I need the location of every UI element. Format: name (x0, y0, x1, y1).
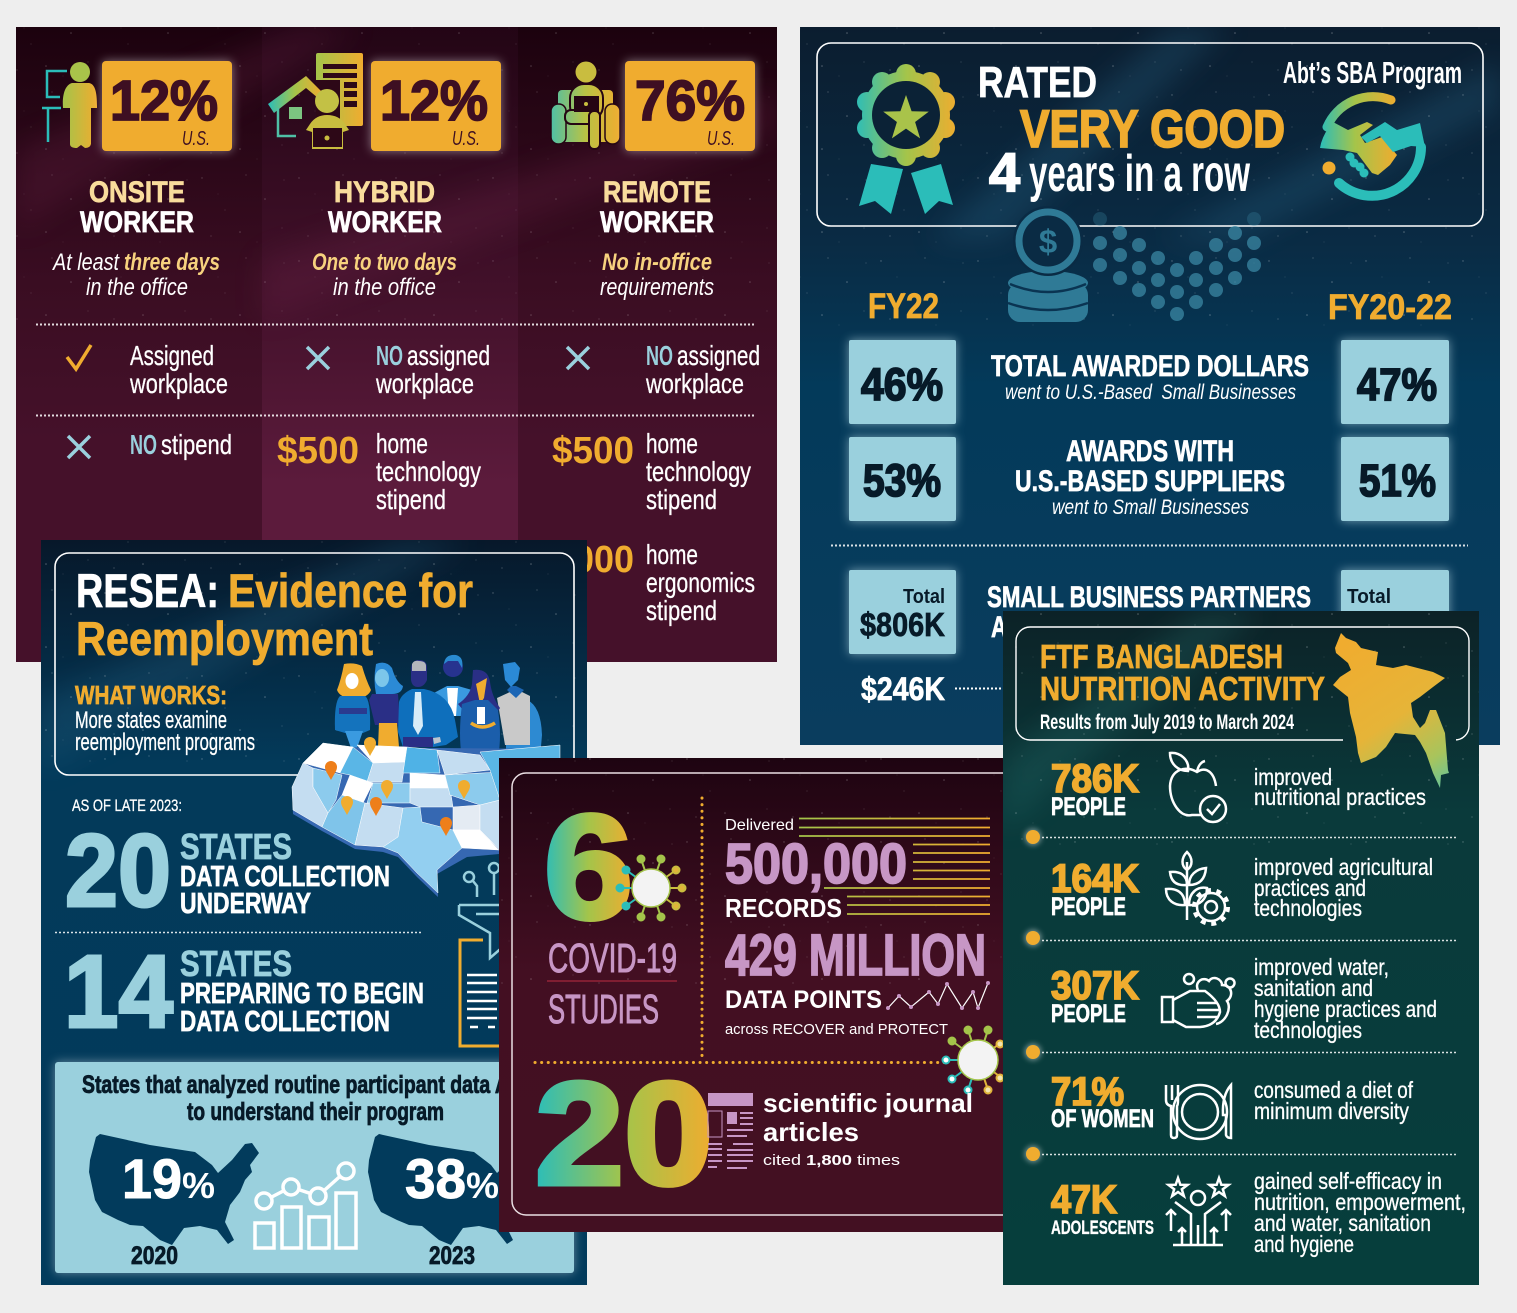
row: remote benefits: workplace (645, 368, 744, 399)
text: remote description: requirements (600, 274, 714, 301)
text: scientific journal articles: scientific journal (763, 1088, 973, 1118)
text: scientific journal articles: 1,800 (806, 1153, 852, 1169)
stat: 20 states: 20 (65, 813, 171, 928)
row: hybrid benefits (277, 340, 490, 515)
heading: onsite worker: ONSITE (89, 176, 185, 209)
title: FTF Bangladesh: FTF BANGLADESH (1040, 638, 1283, 675)
icon: virus (616, 856, 686, 920)
stat boxes: right column: 51% (1359, 455, 1436, 506)
map: United States states with pins (292, 737, 560, 897)
pattern: dotted heart graphic (1093, 212, 1261, 321)
row: hybrid benefits: assigned (407, 340, 490, 371)
row: 307K people: 307K (1051, 964, 1139, 1008)
figure: man behind (432, 655, 472, 716)
row: 786K people: PEOPLE (1051, 793, 1126, 821)
text: small business partners: A (991, 611, 1007, 644)
row: 164K people: PEOPLE (1051, 893, 1126, 921)
dividers with dots (1025, 829, 1456, 1162)
stat boxes: right column (1341, 340, 1449, 654)
stat boxes: left column: Total (903, 586, 945, 608)
text: states that analyzed: to understand their program (187, 1098, 444, 1126)
row: 164K people: 164K (1051, 857, 1139, 901)
row: 164K people (1051, 852, 1433, 924)
row: 307K people: PEOPLE (1051, 1000, 1126, 1028)
row: remote benefits: $500 (552, 430, 634, 472)
title: rated very good: RATED (978, 58, 1097, 107)
row: 71% of women: 71% (1051, 1070, 1124, 1114)
stat boxes: left column: 53% (863, 455, 941, 506)
icon: journal article (708, 1093, 753, 1168)
icon: handshake (1320, 97, 1425, 196)
row: 47K adolescents: gained self-efficacy in (1254, 1168, 1442, 1194)
text: small business partners (987, 581, 1311, 644)
header box (817, 43, 1483, 226)
icon: bar and line chart (255, 1163, 356, 1248)
row: onsite benefits (67, 340, 232, 460)
title: RESEA: Reemployment (76, 612, 373, 665)
row: 786K people: 786K (1051, 757, 1139, 801)
row: 47K adolescents: and hygiene (1254, 1231, 1354, 1257)
stat boxes: right column: Total (1347, 586, 1391, 608)
row: 71% of women: minimum diversity (1254, 1098, 1409, 1124)
text: awards with suppliers: went to Small Businesses (1052, 496, 1249, 519)
heading: hybrid worker: WORKER (328, 206, 442, 239)
stat: data points (725, 923, 986, 1014)
heading: FY20-22: FY20-22 (1328, 288, 1452, 327)
heading: hybrid worker: HYBRID (334, 176, 435, 209)
row: hybrid benefits: technology (376, 456, 481, 487)
title: FTF Bangladesh: NUTRITION ACTIVITY (1040, 670, 1325, 707)
title: RESEA: Evidence for (228, 564, 473, 617)
row: onsite benefits: stipend (161, 429, 232, 460)
heading: onsite worker (80, 176, 194, 239)
panel: worker types (maroon) (16, 27, 777, 662)
heading: remote worker (600, 176, 714, 239)
heading: FY22: FY22 (868, 287, 939, 326)
text: what works (75, 680, 255, 756)
year: 2023: 2023 (429, 1242, 475, 1270)
row: remote benefits: technology (646, 456, 751, 487)
heading: COVID-19 studies: COVID-19 (548, 935, 677, 981)
icon: coin stack (1008, 206, 1088, 322)
row: remote benefits: stipend (646, 484, 717, 515)
row: 164K people: technologies (1254, 895, 1362, 921)
stat: records delivered: Delivered (725, 817, 794, 834)
stat box: hybrid 12% (371, 61, 501, 151)
text: onsite description: three days (124, 249, 220, 276)
title: rated very good: 4 (989, 141, 1020, 203)
row: 307K people (1051, 954, 1437, 1043)
stat: 20 states: STATES (180, 826, 292, 867)
figure: woman with orange hair (335, 663, 371, 748)
text: as of late 2023: AS OF LATE 2023: (72, 796, 182, 815)
row: hybrid benefits: NO (376, 340, 403, 371)
header box (55, 553, 574, 775)
text: scientific journal articles: times (857, 1153, 900, 1169)
stat: $246K: $246K (861, 671, 945, 707)
icon: plate and cutlery (1166, 1085, 1231, 1139)
row: remote benefits: stipend (646, 595, 717, 626)
heading: onsite worker: WORKER (80, 206, 194, 239)
row: remote benefits: assigned (677, 340, 760, 371)
row: 307K people: improved water, (1254, 954, 1389, 980)
stat box: onsite 12%: U.S. (182, 128, 210, 150)
panel: SBA program (navy) (800, 27, 1500, 745)
figure: man in suit with tie (398, 660, 458, 747)
panel: RESEA evidence for reemployment (41, 540, 587, 1285)
icon: data funnel and clipboard (459, 863, 505, 1046)
panel: COVID-19 studies (499, 758, 1022, 1232)
stat boxes: left column: $806K (860, 606, 945, 643)
year: 2020: 2020 (131, 1242, 178, 1270)
row: hybrid benefits: home (376, 428, 428, 459)
text: small business partners: SMALL BUSINESS PARTNERS (987, 581, 1311, 614)
text: across recover and protect: across RECOVER and PROTECT (725, 1021, 948, 1038)
stat: records delivered (725, 817, 907, 923)
stat: 14 states: 14 (64, 934, 173, 1049)
text: onsite description (51, 249, 220, 301)
row: 307K people: technologies (1254, 1017, 1362, 1043)
stat box: remote 76%: U.S. (707, 128, 735, 150)
frame (512, 773, 1022, 1215)
stat box: remote 76% (625, 61, 755, 151)
row: 47K adolescents: ADOLESCENTS (1051, 1218, 1154, 1239)
title: FTF Bangladesh: Results from July 2019 to March 2024 (1040, 711, 1294, 734)
header box (1016, 627, 1469, 740)
row: 47K adolescents (1051, 1168, 1466, 1257)
heading: COVID-19 studies: STUDIES (548, 986, 659, 1032)
row: 786K people (1051, 753, 1426, 822)
row: 47K adolescents: 47K (1051, 1178, 1117, 1222)
text: total awarded dollars: TOTAL AWARDED DOLLARS (991, 350, 1309, 383)
row: hybrid benefits: stipend (376, 484, 446, 515)
heading: remote worker: WORKER (600, 206, 714, 239)
row: 164K people: practices and (1254, 875, 1366, 901)
figure: woman with glasses (369, 663, 403, 747)
stat: data points: DATA POINTS (725, 986, 882, 1014)
title: RESEA (76, 564, 473, 665)
text: hybrid description (312, 249, 457, 301)
text: remote description: No in-office (602, 249, 712, 276)
row: remote benefits (524, 340, 760, 626)
text: total awarded dollars: went to U.S.-Based Small Businesses (1005, 381, 1296, 404)
row: onsite benefits: Assigned (130, 340, 214, 371)
row: 307K people: hygiene practices and (1254, 996, 1437, 1022)
row: 71% of women: consumed a diet of (1254, 1077, 1413, 1103)
text: scientific journal articles (763, 1088, 973, 1169)
map: Bangladesh (1333, 633, 1449, 788)
row: 47K adolescents: nutrition, empowerment, (1254, 1189, 1466, 1215)
decorative data lines (799, 818, 990, 914)
text: onsite description: At least (51, 249, 120, 276)
map: 2020 19%: % (182, 1165, 215, 1206)
text: what works: More states examine (75, 707, 227, 734)
icon: virus large (942, 1026, 1004, 1094)
row: 71% of women (1051, 1070, 1413, 1139)
stat: records delivered: RECORDS (725, 893, 842, 923)
title: RESEA: RESEA: (76, 564, 219, 617)
text: states that analyzed (82, 1071, 537, 1126)
title: rated very good: years in a row (1029, 145, 1250, 203)
text: total awarded dollars (991, 350, 1309, 404)
icon: hand washing (1162, 974, 1234, 1027)
icon: hybrid worker house and documents (268, 53, 363, 149)
text: awards with suppliers: U.S.-BASED SUPPLIERS (1015, 465, 1285, 498)
map: 2023 38%: 38 (405, 1147, 466, 1210)
heading: COVID-19 studies (547, 935, 677, 1032)
row: hybrid benefits: workplace (375, 368, 474, 399)
stat: 14 states: STATES (180, 943, 292, 984)
stat box: onsite 12% (102, 61, 232, 151)
stat: 14 states: DATA COLLECTION (180, 1006, 390, 1038)
map: 2020 19%: 19 (122, 1147, 182, 1210)
row: 164K people: improved agricultural (1254, 854, 1433, 880)
stat: 20 numeral: 20 (535, 1052, 713, 1215)
stat box: hybrid 12%: U.S. (452, 128, 480, 150)
map: 2020 19% (89, 1134, 259, 1245)
text: states that analyzed: States that analyzed routine participant data AND (82, 1071, 537, 1099)
text: hybrid description: One to two days (312, 249, 457, 276)
icon: plant and gear (1166, 852, 1228, 924)
row: onsite benefits: NO (130, 429, 157, 460)
text: remote description (600, 249, 714, 301)
stat box: hybrid 12%: 12% (380, 69, 488, 133)
row: 47K adolescents: and water, sanitation (1254, 1210, 1431, 1236)
row: remote benefits: home (646, 428, 698, 459)
title: rated very good (978, 58, 1285, 203)
stat box: remote 76%: 76% (635, 69, 745, 133)
text: what works: reemployment programs (75, 729, 255, 756)
heading: remote worker: REMOTE (603, 176, 711, 209)
text: hybrid description: in the office (333, 274, 436, 301)
text: scientific journal articles: articles (763, 1117, 859, 1147)
stat: data points: 429 MILLION (725, 923, 986, 988)
icon: remote worker in armchair (551, 62, 620, 149)
row: remote benefits: NO (646, 340, 673, 371)
figure: man in grey vest (497, 662, 542, 760)
row: 786K people: nutritional practices (1254, 784, 1426, 810)
stat: 14 states: PREPARING TO BEGIN (180, 978, 424, 1010)
map: 2023 38% (368, 1134, 538, 1245)
map: 2023 38%: % (466, 1165, 499, 1206)
icon: adolescent with stars and arrows (1166, 1178, 1231, 1245)
stat: 20 states: DATA COLLECTION (180, 861, 390, 893)
row: remote benefits: ergonomics (646, 567, 755, 598)
stat boxes: left column: 46% (861, 359, 943, 410)
panel: FTF Bangladesh nutrition activity (1003, 611, 1479, 1285)
icon: award rosette (857, 64, 955, 214)
row: hybrid benefits: $500 (277, 430, 359, 472)
stat boxes: left column (849, 340, 956, 654)
icon: apple with check (1170, 753, 1226, 822)
stat: 20 states: UNDERWAY (180, 888, 311, 920)
stat: 20 states (65, 813, 390, 928)
text: awards with suppliers: AWARDS WITH (1066, 435, 1234, 468)
stat boxes: right column: 47% (1357, 359, 1437, 410)
panel: routine participant data (55, 1062, 574, 1273)
heading: hybrid worker (328, 176, 442, 239)
row: remote benefits: $1,000 (524, 539, 634, 581)
stat: 6 studies numeral: 6 (544, 785, 633, 950)
icon: coin stack: $ (1039, 223, 1057, 260)
icon: onsite worker at desk (42, 62, 97, 148)
text: onsite description: in the office (86, 274, 188, 301)
text: scientific journal articles: cited (763, 1153, 801, 1169)
illustration: group of people (335, 655, 542, 760)
title: FTF Bangladesh (1040, 638, 1325, 734)
row: remote benefits: home (646, 539, 698, 570)
chart: sparkline (886, 981, 990, 1010)
stat: 14 states (64, 934, 424, 1049)
row: onsite benefits: workplace (129, 368, 228, 399)
row: 307K people: sanitation and (1254, 975, 1373, 1001)
row: 71% of women: OF WOMEN (1051, 1105, 1154, 1133)
text: awards with suppliers (1015, 435, 1285, 519)
row: 786K people: improved (1254, 764, 1332, 790)
title: rated very good: VERY GOOD (1020, 100, 1285, 159)
stat box: onsite 12%: 12% (110, 69, 218, 133)
text: what works: WHAT WORKS: (75, 680, 227, 710)
stat: records delivered: 500,000 (725, 832, 907, 896)
figure: woman with crossed arms (458, 670, 500, 758)
